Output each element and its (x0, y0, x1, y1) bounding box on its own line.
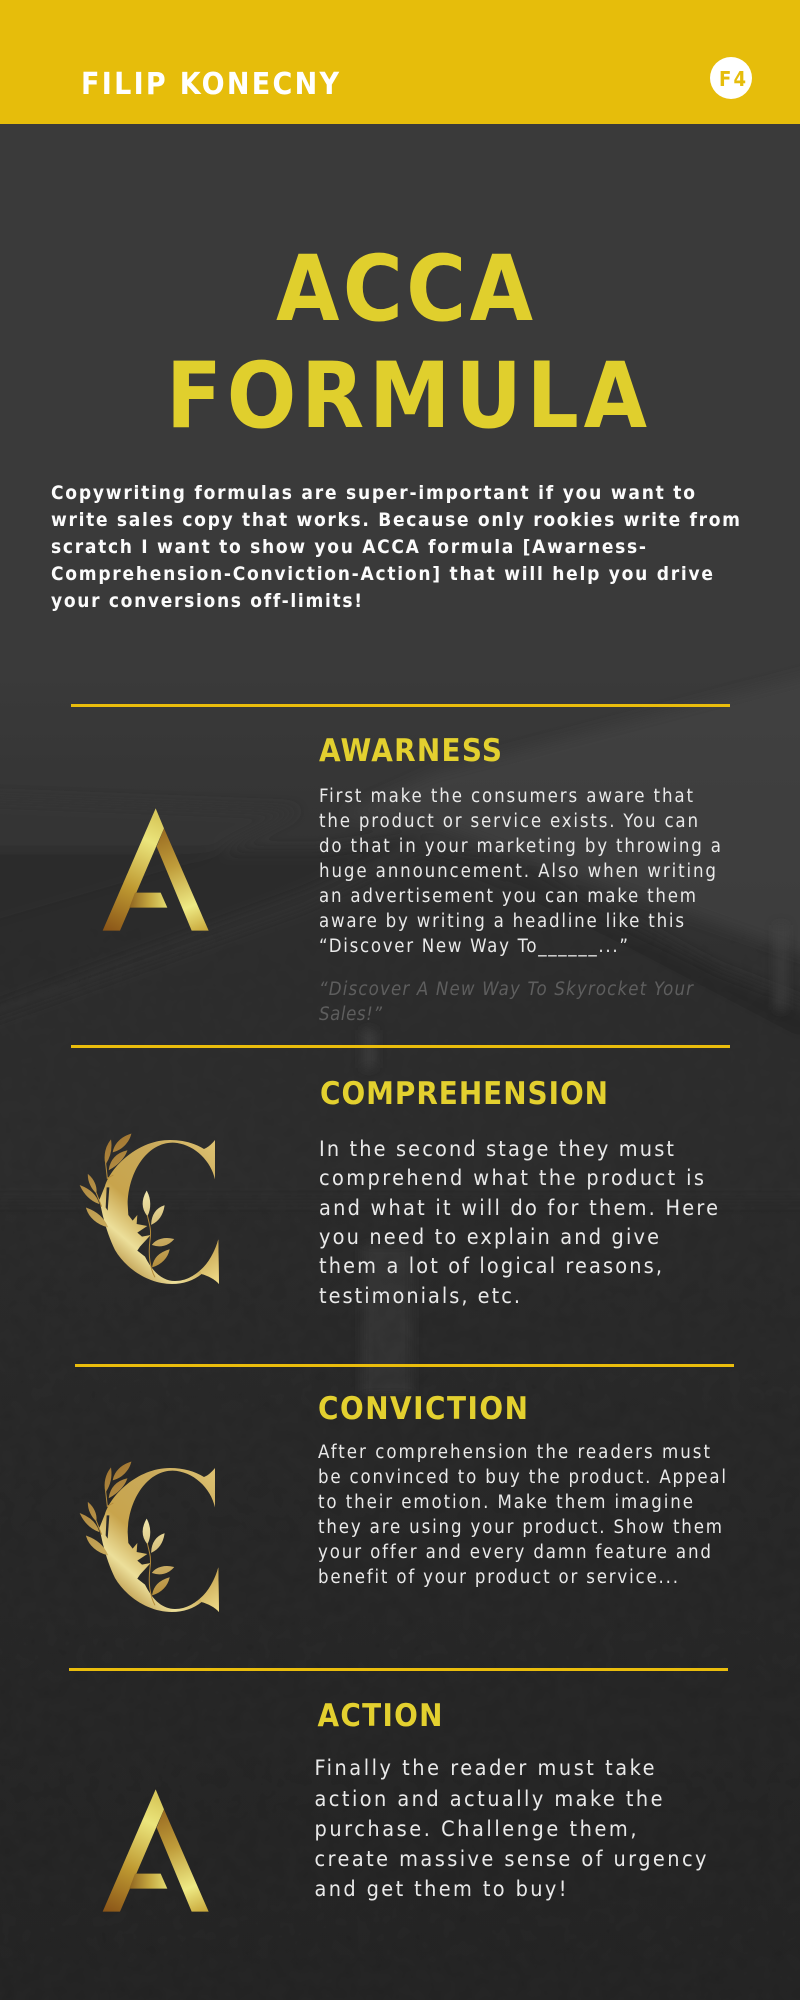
awarness body text: “Discover New Way To______...” (319, 936, 628, 957)
panel: comprehension (81, 1076, 718, 1309)
comprehension body text: testimonials, etc. (319, 1284, 520, 1309)
intro paragraph: your conversions off-limits! (51, 590, 362, 612)
heading: comprehension: COMPREHENSION (320, 1076, 608, 1112)
icon: gold floral letter C (81, 1134, 219, 1284)
conviction body text: After comprehension the readers must (318, 1442, 710, 1463)
intro paragraph: Copywriting formulas are super-important if you want to (51, 482, 695, 504)
awarness example quote: “Discover A New Way To Skyrocket Your (319, 979, 694, 1000)
awarness body text: an advertisement you can make them (319, 886, 696, 907)
panel: conviction (81, 1391, 726, 1612)
awarness example quote (319, 979, 694, 1025)
panel: awarness (103, 733, 721, 1025)
comprehension body text: In the second stage they must (319, 1137, 674, 1162)
comprehension body text: them a lot of logical reasons, (319, 1254, 662, 1279)
header band (0, 0, 800, 124)
intro paragraph (51, 482, 740, 612)
title: ACCA (276, 237, 533, 342)
logo badge (710, 57, 752, 99)
action body text: action and actually make the (314, 1787, 662, 1812)
heading: conviction: CONVICTION (318, 1391, 528, 1427)
divider rules (69, 704, 734, 1671)
awarness body text: aware by writing a headline like this (319, 911, 684, 932)
awarness body text (319, 786, 721, 957)
awarness body text: do that in your marketing by throwing a (319, 836, 721, 857)
awarness example quote: Sales!” (319, 1004, 382, 1025)
logo badge: F4 (719, 67, 746, 91)
title (166, 237, 647, 449)
heading: action: ACTION (318, 1698, 442, 1734)
comprehension body text: and what it will do for them. Here (319, 1196, 718, 1221)
action body text: purchase. Challenge them, (314, 1817, 636, 1842)
action body text: and get them to buy! (314, 1877, 566, 1902)
comprehension body text: you need to explain and give (319, 1225, 659, 1250)
icon: gold floral letter C (81, 1462, 219, 1612)
icon: gold letter A (103, 808, 209, 931)
action body text (314, 1756, 706, 1902)
awarness body text: First make the consumers aware that (319, 786, 693, 807)
conviction body text: be convinced to buy the product. Appeal (318, 1467, 726, 1488)
heading: awarness: AWARNESS (319, 733, 502, 769)
conviction body text: they are using your product. Show them (318, 1517, 722, 1538)
intro paragraph: write sales copy that works. Because only rookies write from (51, 509, 740, 531)
comprehension body text (319, 1137, 718, 1309)
intro paragraph: Comprehension-Conviction-Action] that will help you drive (51, 563, 713, 585)
awarness body text: the product or service exists. You can (319, 811, 698, 832)
conviction body text: to their emotion. Make them imagine (318, 1492, 693, 1513)
icon: gold letter A (103, 1789, 209, 1912)
action body text: create massive sense of urgency (314, 1847, 706, 1872)
conviction body text: your offer and every damn feature and (318, 1542, 711, 1563)
action body text: Finally the reader must take (314, 1756, 654, 1781)
conviction body text: benefit of your product or service... (318, 1567, 678, 1588)
conviction body text (318, 1442, 726, 1588)
intro paragraph: scratch I want to show you ACCA formula [Awarness- (51, 536, 646, 558)
author name: FILIP KONECNY (81, 67, 339, 102)
awarness body text: huge announcement. Also when writing (319, 861, 716, 882)
comprehension body text: comprehend what the product is (319, 1166, 704, 1191)
title: FORMULA (166, 344, 647, 449)
panel: action (103, 1698, 706, 1912)
